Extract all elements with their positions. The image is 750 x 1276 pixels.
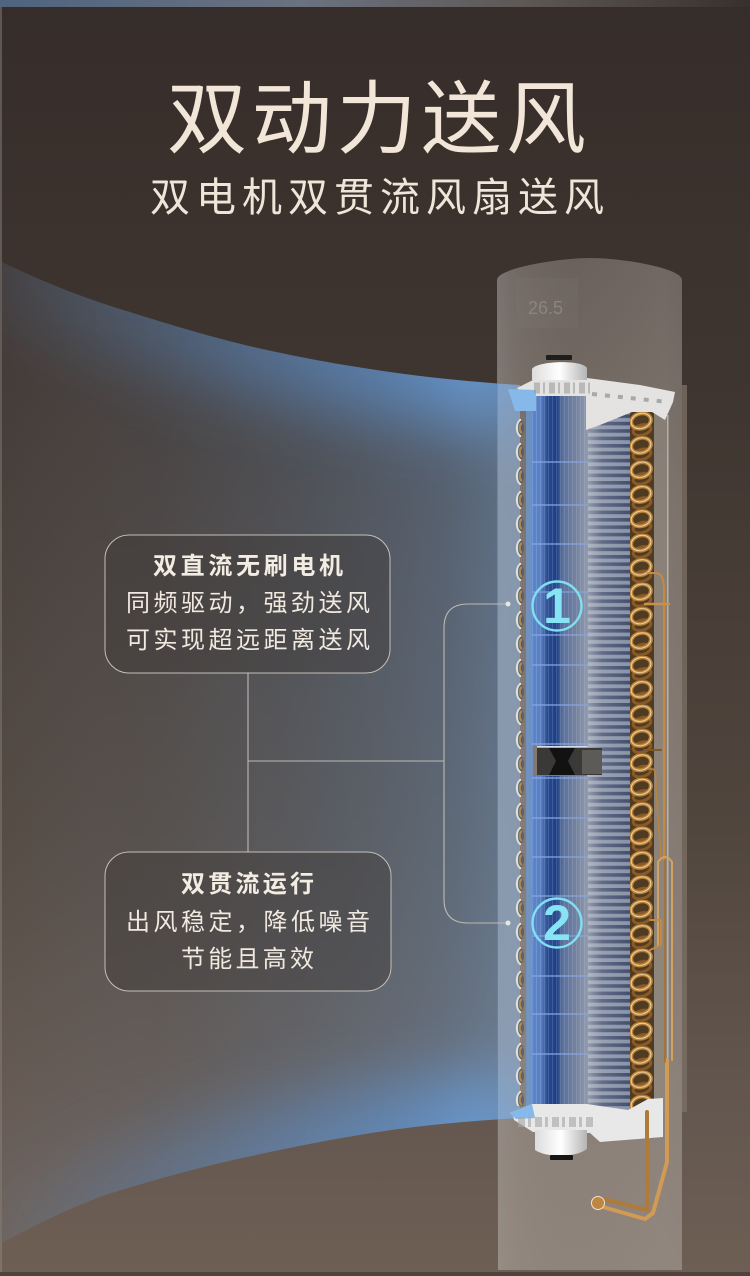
connector lines	[248, 602, 510, 926]
callout: cross-flow: 节能且高效	[181, 946, 314, 973]
display panel	[516, 278, 578, 328]
top motor cap	[532, 355, 587, 380]
callout: cross-flow	[105, 852, 391, 991]
marker 2	[532, 895, 582, 951]
callout: cross-flow: 出风稳定，降低噪音	[126, 909, 370, 936]
lower fan	[532, 776, 588, 1106]
upper fan	[532, 396, 588, 746]
marker 1: 1	[543, 578, 571, 634]
fins	[587, 412, 630, 1110]
fan rings	[532, 462, 588, 1054]
callout: motor	[105, 535, 390, 673]
right copper coil	[630, 412, 654, 1112]
marker 1	[532, 578, 582, 634]
internal unit	[508, 355, 675, 1219]
bottom bracket	[509, 1098, 663, 1142]
bottom motor cap	[535, 1130, 587, 1160]
copper pipes	[592, 573, 672, 1219]
callout: motor: 双直流无刷电机	[153, 553, 343, 580]
center motor	[537, 746, 602, 775]
top bracket	[508, 378, 675, 430]
subtitle: 双电机双贯流风扇送风	[150, 176, 604, 220]
air conditioner body	[497, 258, 687, 1270]
display panel: 26.5	[528, 298, 563, 318]
marker 2: 2	[543, 895, 571, 951]
callout: motor: 同频驱动，强劲送风	[126, 590, 370, 617]
airflow	[0, 245, 520, 1262]
callout: cross-flow: 双贯流运行	[181, 871, 314, 898]
left heat exchanger coil	[513, 416, 527, 1106]
title: 双动力送风	[167, 75, 586, 164]
callout: motor: 可实现超远距离送风	[126, 627, 370, 654]
